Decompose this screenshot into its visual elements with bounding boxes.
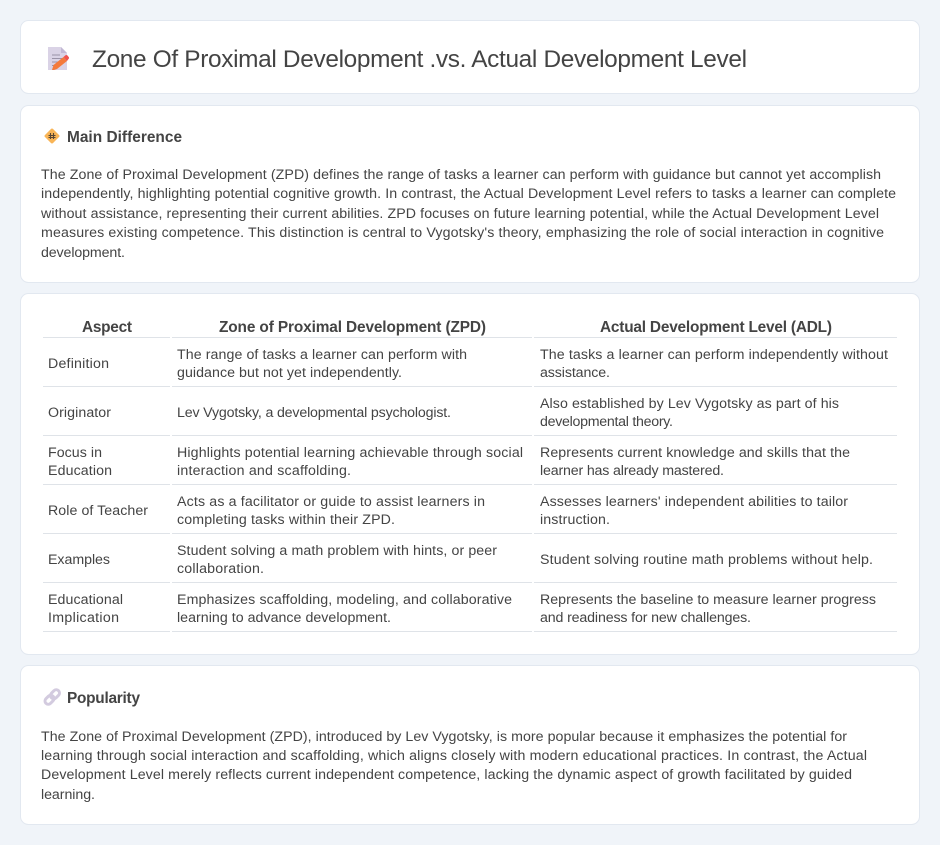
text block: popularity paragraph: learning. <box>41 787 95 803</box>
icon: memo with pencil <box>48 47 69 70</box>
panel: comparison table <box>20 294 920 654</box>
table row: examples: Examples <box>48 552 110 568</box>
icon: chain link <box>44 688 61 706</box>
heading: main difference: Main Difference <box>67 129 182 146</box>
table row: educational implication: Educational <box>48 592 123 608</box>
table header row: Actual Development Level (ADL) <box>600 319 832 336</box>
table header row <box>43 319 897 338</box>
table row: educational implication <box>43 592 897 632</box>
heading: popularity: Popularity <box>67 690 140 707</box>
table row: definition: The tasks a learner can perform independently without <box>540 347 888 363</box>
table row: educational implication: Emphasizes scaffolding, modeling, and collaborative <box>177 592 512 608</box>
table row: definition <box>43 347 897 386</box>
table row: focus in education: learner has already mastered. <box>540 463 724 479</box>
table row: definition: guidance but not yet independently. <box>177 365 402 381</box>
table row: definition: The range of tasks a learner can perform with <box>177 347 467 363</box>
table row: focus in education: Represents current knowledge and skills that the <box>540 445 850 461</box>
table row: educational implication: learning to advance development. <box>177 610 391 626</box>
table row: role of teacher: Role of Teacher <box>48 503 148 519</box>
panel: main difference <box>20 106 920 282</box>
table row: role of teacher <box>43 494 897 534</box>
table row: role of teacher: instruction. <box>540 512 610 528</box>
table row: focus in education <box>43 445 897 484</box>
icon: diamond sign <box>44 128 60 144</box>
table header row: Zone of Proximal Development (ZPD) <box>219 319 486 336</box>
table row: educational implication: Represents the baseline to measure learner progress <box>540 592 876 608</box>
text block: popularity paragraph: learning through social interaction and scaffolding, which aligns closely with modern educational practices. In contrast, the Actual <box>41 748 867 764</box>
table row: examples: Student solving routine math problems without help. <box>540 552 873 568</box>
table row: educational implication: and readiness for new challenges. <box>540 610 751 626</box>
table row: role of teacher: completing tasks within their ZPD. <box>177 512 395 528</box>
text block: main difference paragraph: measures existing competence. This distinction is central to Vygotsky's theory, emphasizing the role of social interaction in cognitive <box>41 225 884 241</box>
table row: originator: Also established by Lev Vygotsky as part of his <box>540 396 839 412</box>
text block: popularity paragraph: The Zone of Proximal Development (ZPD), introduced by Lev Vygotsky, is more popular because it emphasizes the potential for <box>41 729 847 745</box>
text block: main difference paragraph: independently, highlighting potential cognitive growth. In contrast, the Actual Development Level refers to tasks a learner can complete <box>41 186 896 202</box>
table row: educational implication: Implication <box>48 610 119 626</box>
table row: focus in education: Education <box>48 463 112 479</box>
text block: main difference paragraph: development. <box>41 245 125 261</box>
table row: definition: assistance. <box>540 365 610 381</box>
text block: main difference paragraph <box>40 167 896 261</box>
table header row: Aspect <box>82 319 132 336</box>
table row: originator: developmental theory. <box>540 414 673 430</box>
table row: originator: Lev Vygotsky, a developmental psychologist. <box>177 405 451 421</box>
text block: popularity paragraph: Development Level merely reflects current independent competence, lacking the dynamic aspect of growth facilitated by guided <box>41 767 852 783</box>
table row: role of teacher: Acts as a facilitator or guide to assist learners in <box>177 494 485 510</box>
text block: popularity paragraph <box>41 729 867 803</box>
panel: popularity <box>20 666 920 824</box>
table row: focus in education: Highlights potential learning achievable through social <box>177 445 523 461</box>
table row: focus in education: Focus in <box>48 445 102 461</box>
table row: focus in education: interaction and scaffolding. <box>177 463 351 479</box>
table row: examples <box>43 543 897 582</box>
text block: main difference paragraph: without assistance, representing their current abilities. ZPD focuses on future learning potential, while the Actual Development Level <box>40 206 879 222</box>
panel: title header <box>20 20 920 94</box>
table row: originator: Originator <box>48 405 111 421</box>
table row: examples: collaboration. <box>177 561 264 577</box>
table row: examples: Student solving a math problem with hints, or peer <box>177 543 497 559</box>
table row: definition: Definition <box>48 356 109 372</box>
text block: main difference paragraph: The Zone of Proximal Development (ZPD) defines the range of tasks a learner can perform with guidance but cannot yet accomplish <box>41 167 881 183</box>
title: Zone Of Proximal Development .vs. Actual Development Level <box>92 46 747 73</box>
table row: originator <box>43 396 897 436</box>
table row: role of teacher: Assesses learners' independent abilities to tailor <box>540 494 848 510</box>
